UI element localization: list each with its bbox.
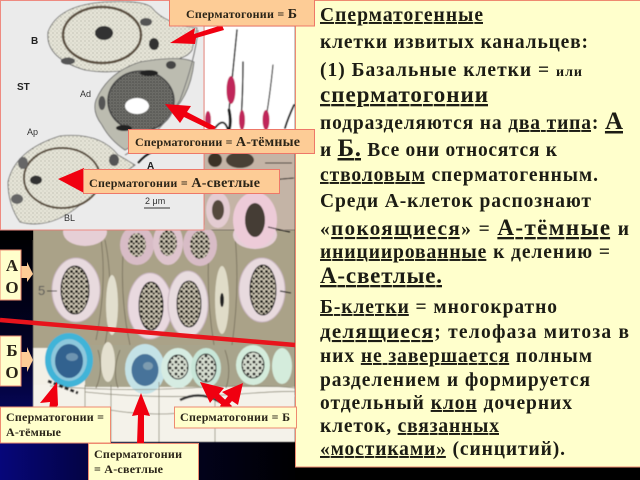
arrow: lower A dark xyxy=(40,382,58,410)
boundary line between zones xyxy=(0,320,295,345)
text panel xyxy=(296,0,640,467)
zone label: БО: Б xyxy=(6,341,18,360)
paragraph: basal cells: подразделяются на два типа: А xyxy=(320,108,623,135)
label: 5: 5 xyxy=(38,283,45,298)
callout: А-светлые (top): Сперматогонии = А-светлые xyxy=(89,176,260,191)
paragraph: A cells xyxy=(320,191,629,288)
paragraph: B cells: «мостиками» (синцитий). xyxy=(320,439,565,460)
callout: А-тёмные (bottom): А-тёмные xyxy=(6,425,62,439)
micrograph labels: BL xyxy=(64,213,75,223)
callout: А-светлые (top) xyxy=(84,170,280,194)
micrograph labels xyxy=(17,36,170,223)
micrograph labels: Ad xyxy=(80,89,91,99)
zone label: АО: А xyxy=(6,256,19,275)
arrow: to cell Ad xyxy=(165,104,216,131)
callout: А-тёмные (top) xyxy=(128,130,314,154)
arrows: lower B xyxy=(200,382,243,410)
heading: Сперматогенные xyxy=(320,5,483,26)
paragraph: B cells: клеток, связанных xyxy=(320,416,499,437)
spermatogonia: B xyxy=(161,345,292,388)
histology image: lower tubule wall xyxy=(33,218,301,442)
callout: А-светлые (bottom): = А-светлые xyxy=(94,462,164,476)
callout: А-тёмные (bottom) xyxy=(0,407,110,443)
callout: А-тёмные (bottom): Сперматогонии = xyxy=(6,410,104,424)
callout: Б (bottom) xyxy=(174,407,296,428)
callout: Б (bottom): Сперматогонии = Б xyxy=(180,410,290,424)
spermatogonia: A dark xyxy=(45,333,93,387)
paragraph: A cells: инициированные к делению = xyxy=(320,242,610,263)
paragraph: A cells: А-светлые. xyxy=(320,263,442,288)
paragraph: basal cells: и Б. Все они относятся к xyxy=(320,135,558,162)
micrograph labels: B xyxy=(31,36,38,47)
paragraph: B cells: Б-клетки = многократно xyxy=(320,297,557,318)
paragraph: B cells: делящиеся; телофаза митоза в xyxy=(320,319,629,343)
arrow: to cell B xyxy=(170,25,224,44)
paragraph: basal cells: (1) Базальные клетки = или xyxy=(320,60,582,81)
zone label: АО: О xyxy=(5,278,19,297)
paragraph: A cells: Среди А-клеток распознают xyxy=(320,191,591,212)
paragraph: B cells: отдельный клон дочерних xyxy=(320,393,572,414)
paragraph: B cells: разделением и формируется xyxy=(320,370,590,391)
paragraph: B cells: них не завершается полным xyxy=(320,346,592,367)
upper row cells xyxy=(63,218,277,266)
paragraph: basal cells: стволовым сперматогенным. xyxy=(320,165,598,186)
cell Ad xyxy=(95,58,194,150)
basement membrane xyxy=(48,381,301,442)
micrograph labels: 2 μm xyxy=(145,196,165,206)
callout: Сперматогонии = Б (top): Сперматогонии = Б xyxy=(186,7,297,22)
arrow: to cell Ap xyxy=(58,168,84,193)
zone label: АО xyxy=(0,250,33,300)
paragraph: B cells xyxy=(320,297,629,460)
paragraph: A cells: «покоящиеся» = А-тёмные и xyxy=(320,215,629,240)
spermatogonia: A light xyxy=(125,344,165,394)
zone label: БО xyxy=(0,336,33,386)
electron micrograph panel xyxy=(0,0,204,230)
slide background xyxy=(0,230,640,480)
callout: А-светлые (bottom) xyxy=(88,444,198,480)
paragraph: basal cells xyxy=(320,60,623,186)
micrograph labels: ST xyxy=(17,82,30,93)
micrograph labels: A xyxy=(147,161,154,172)
callout: Сперматогонии = Б (top) xyxy=(170,0,314,26)
histology image: spermatid tails xyxy=(204,26,295,248)
arrow: lower A light xyxy=(132,393,150,444)
zone label: БО: О xyxy=(5,363,19,382)
sertoli cells xyxy=(101,266,229,382)
cell B xyxy=(48,2,197,72)
micrograph labels: Ap xyxy=(27,127,38,137)
cell Ap xyxy=(8,135,135,224)
text panel: клетки извитых канальцев: xyxy=(320,32,588,53)
black notch xyxy=(0,230,33,240)
large spermatocytes xyxy=(52,258,285,339)
callout: А-тёмные (top): Сперматогонии = А-тёмные xyxy=(135,135,300,150)
callout: А-светлые (bottom): Сперматогонии xyxy=(94,447,182,461)
paragraph: basal cells: сперматогонии xyxy=(320,82,488,107)
